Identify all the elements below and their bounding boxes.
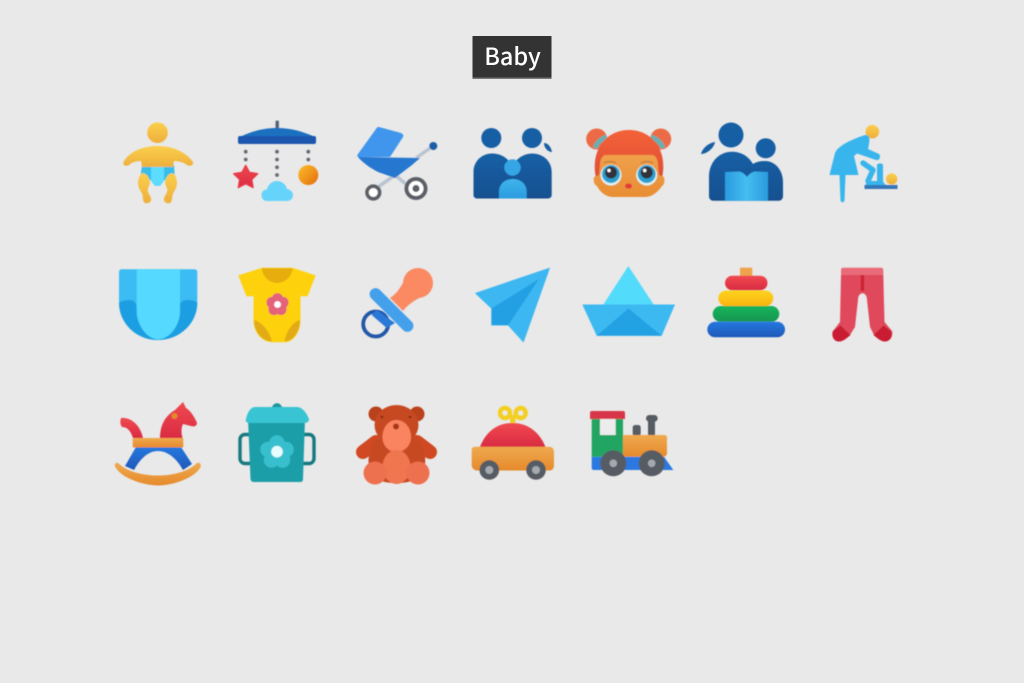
icon: family with child: [474, 128, 552, 198]
icon grid: [115, 120, 897, 486]
icon: pacifier: [363, 268, 433, 336]
icon: paper boat: [582, 266, 675, 336]
icon: toy car: [472, 408, 554, 480]
icon: changing table: [830, 125, 898, 202]
icon: baby in diaper: [123, 122, 193, 203]
title: Baby: Baby: [484, 38, 541, 72]
icon: onesie: [239, 268, 315, 342]
icon: baby stroller: [357, 127, 437, 199]
icon: toy train: [590, 411, 673, 476]
icon: doll face: [586, 128, 671, 197]
icon: teddy bear: [363, 405, 430, 484]
icon: sippy cup: [240, 403, 314, 482]
icon: rocking horse: [115, 402, 201, 486]
icon: diaper: [119, 269, 197, 340]
icon: red tights: [832, 268, 892, 342]
title: Baby: [472, 36, 552, 79]
icon: crib mobile: [234, 120, 318, 201]
icon: parent and child reading: [701, 122, 783, 201]
icon: paper plane: [476, 268, 549, 342]
icon: stacking rings: [707, 268, 785, 337]
